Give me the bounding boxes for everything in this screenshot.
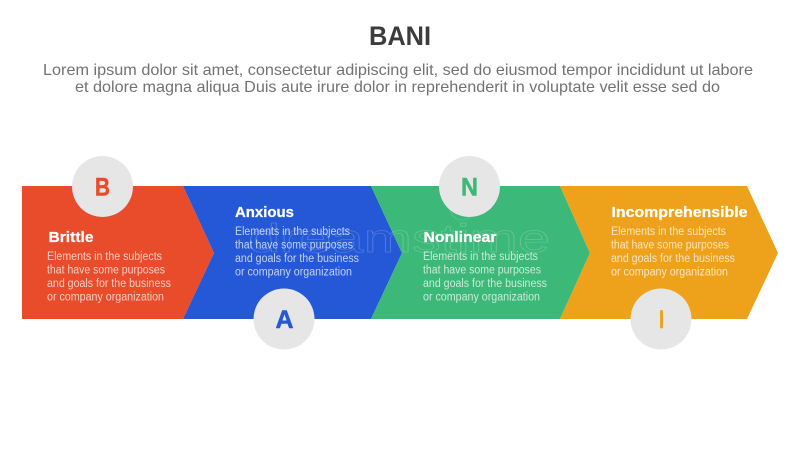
text block: Anxious <box>235 205 359 278</box>
text block: Brittle: or company organization <box>47 292 164 304</box>
text block: Nonlinear: Elements in the subjects <box>423 251 538 263</box>
text block: Nonlinear: or company organization <box>423 292 540 304</box>
circle badge: I <box>630 288 692 350</box>
subtitle text: Lorem ipsum dolor sit amet, consectetur adipiscing elit, sed do eiusmod tempor incididunt ut labore <box>43 62 753 79</box>
circle badge: A: A <box>276 306 294 334</box>
text block: Brittle: that have some purposes <box>47 264 165 276</box>
circle badge: I: I <box>659 306 664 334</box>
circle badge: N <box>439 156 500 217</box>
subtitle text: et dolore magna aliqua Duis aute irure dolor in reprehenderit in voluptate velit esse sed do <box>75 79 720 96</box>
text block: Brittle: Elements in the subjects <box>47 251 162 263</box>
text block: Incomprehensible <box>611 205 748 278</box>
watermark <box>248 196 550 261</box>
text block: Incomprehensible: or company organization <box>611 266 728 278</box>
text block: Incomprehensible: Elements in the subjects <box>611 226 726 238</box>
arrow segment: Incomprehensible <box>560 186 778 319</box>
text block: Anxious: and goals for the business <box>235 253 359 265</box>
text block: Nonlinear: and goals for the business <box>423 278 547 290</box>
text block: Incomprehensible: and goals for the business <box>611 253 735 265</box>
title: BANI <box>369 21 431 51</box>
text block: Anxious: Anxious <box>235 205 294 221</box>
text block: Brittle: Brittle <box>48 230 94 246</box>
text block: Nonlinear: that have some purposes <box>423 264 541 276</box>
text block: Nonlinear: Nonlinear <box>424 230 497 246</box>
circle badge: B <box>72 156 133 217</box>
arrow segment: Brittle <box>22 186 214 319</box>
text block: Anxious: Elements in the subjects <box>235 226 350 238</box>
text block: Incomprehensible: Incomprehensible <box>612 205 748 221</box>
circle badge: N: N <box>461 174 478 202</box>
text block: Brittle: and goals for the business <box>47 278 171 290</box>
arrow segment: Anxious <box>183 186 402 319</box>
text block: Brittle <box>47 230 171 304</box>
text block: Incomprehensible: that have some purposes <box>611 240 729 252</box>
circle badge: B: B <box>95 174 110 202</box>
watermark: dreamstime <box>248 217 550 261</box>
text block: Anxious: or company organization <box>235 266 352 278</box>
subtitle text <box>43 62 753 96</box>
circle badge: A <box>254 288 314 350</box>
text block: Nonlinear <box>423 230 547 304</box>
text block: Anxious: that have some purposes <box>235 240 353 252</box>
arrow segment: Nonlinear <box>371 186 590 319</box>
